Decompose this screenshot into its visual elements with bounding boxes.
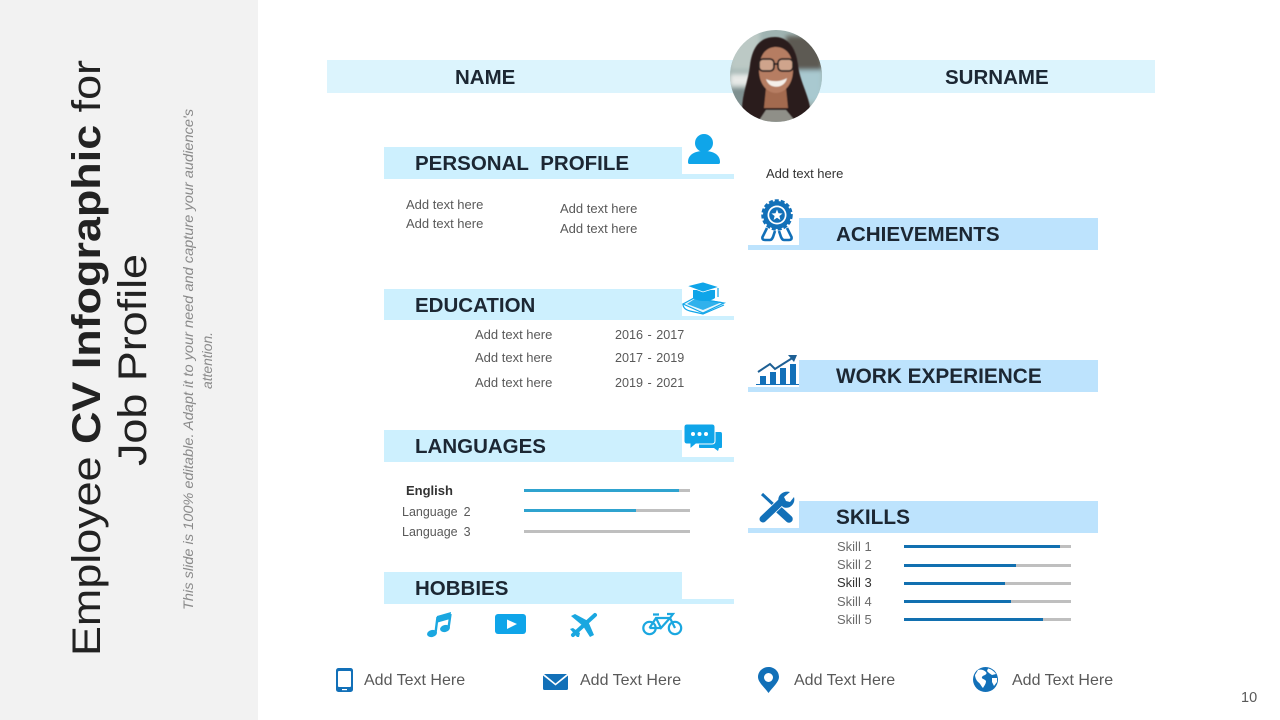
label: skill 1: Skill 1 — [837, 539, 872, 554]
heading bar — [384, 147, 682, 179]
year: 2016 - 2017 — [615, 328, 684, 342]
bar: skill 1 — [904, 545, 1071, 548]
text: Add Text Here — [364, 672, 465, 689]
heading bar — [799, 501, 1098, 533]
heading bar — [799, 360, 1098, 392]
label: english: English — [406, 483, 453, 498]
row: Add text here — [475, 375, 552, 390]
year: 2017 - 2019 — [615, 351, 684, 365]
row: Add text here — [475, 350, 552, 365]
skill rows — [837, 539, 1071, 627]
section: skills — [748, 492, 1098, 533]
heading: SKILLS — [836, 506, 910, 529]
heading bar — [384, 289, 682, 320]
contact: web — [973, 667, 1113, 692]
underline — [384, 316, 734, 320]
label: skill 3: Skill 3 — [837, 575, 872, 590]
year: 2019 - 2021 — [615, 376, 684, 390]
education table — [475, 327, 684, 390]
underline — [384, 174, 734, 179]
sidebar title — [65, 60, 215, 656]
sidebar title: attention. — [199, 332, 215, 389]
bar: skill 2 — [904, 564, 1071, 567]
icon: speech bubbles — [684, 424, 722, 451]
underline — [384, 599, 734, 604]
bar: skill 5 — [904, 618, 1071, 621]
bar: english — [524, 489, 690, 492]
text: Add Text Here — [1012, 672, 1113, 689]
sidebar panel — [0, 0, 258, 720]
heading bar — [384, 572, 682, 604]
contact: location — [758, 667, 895, 693]
underline — [748, 387, 800, 392]
heading: HOBBIES — [415, 577, 508, 600]
label: language 2: Language 2 — [402, 505, 471, 519]
icon: bicycle — [642, 612, 682, 636]
heading: LANGUAGES — [415, 435, 546, 458]
sidebar title: Job Profile — [111, 254, 155, 466]
section: education — [384, 282, 734, 320]
label: skill 5: Skill 5 — [837, 612, 872, 627]
text: Add Text Here — [794, 672, 895, 689]
heading: PERSONAL PROFILE — [415, 152, 629, 175]
section: languages — [384, 424, 734, 462]
page number: 10 — [1241, 690, 1257, 706]
icon: envelope — [543, 674, 568, 690]
line: Add text here — [560, 201, 637, 216]
sidebar title: Employee CV Infographic for — [65, 60, 109, 656]
contact: mail — [543, 672, 681, 690]
bar: skill 3 — [904, 582, 1071, 585]
icon: airplane — [570, 612, 598, 638]
sidebar title: This slide is 100% editable. Adapt it to your need and capture your audience's — [180, 109, 196, 610]
icon: growth chart — [756, 355, 799, 385]
bar: skill 4 — [904, 600, 1071, 603]
heading: WORK EXPERIENCE — [836, 365, 1042, 388]
name label: NAME — [455, 66, 515, 89]
label: skill 2: Skill 2 — [837, 557, 872, 572]
label: skill 4: Skill 4 — [837, 594, 872, 609]
name banner — [327, 60, 1155, 93]
icon: award ribbon — [761, 199, 793, 242]
line: Add text here — [560, 221, 637, 236]
section: achievements — [748, 199, 1098, 250]
underline — [384, 457, 734, 462]
text: add text here: Add text here — [766, 166, 843, 181]
icon: phone — [336, 668, 353, 692]
heading bar — [384, 430, 682, 462]
profile text column 1 — [406, 197, 483, 231]
bar: language 3 — [524, 530, 690, 533]
heading: ACHIEVEMENTS — [836, 223, 1000, 246]
underline — [748, 245, 800, 250]
icon: person — [688, 134, 720, 164]
section: personal profile — [384, 134, 734, 179]
icon: globe — [973, 667, 998, 692]
row: Add text here — [475, 327, 552, 342]
icon: map pin — [758, 667, 779, 693]
line: Add text here — [406, 216, 483, 231]
bar: language 2 — [524, 509, 690, 512]
label: language 3: Language 3 — [402, 525, 471, 539]
contact: phone — [336, 668, 465, 692]
icon: music note — [427, 612, 452, 638]
profile text column 2 — [560, 201, 637, 236]
icon: crossed tools — [760, 492, 794, 523]
underline — [748, 528, 800, 533]
text: Add Text Here — [580, 672, 681, 689]
icon: graduation cap on book — [682, 282, 726, 315]
surname label: SURNAME — [945, 66, 1049, 89]
section: work experience — [748, 355, 1098, 392]
profile photo — [730, 30, 822, 122]
line: Add text here — [406, 197, 483, 212]
heading: EDUCATION — [415, 294, 535, 317]
language rows — [402, 483, 690, 539]
section: hobbies — [384, 572, 734, 604]
icon: video play — [495, 614, 526, 634]
heading bar — [799, 218, 1098, 250]
